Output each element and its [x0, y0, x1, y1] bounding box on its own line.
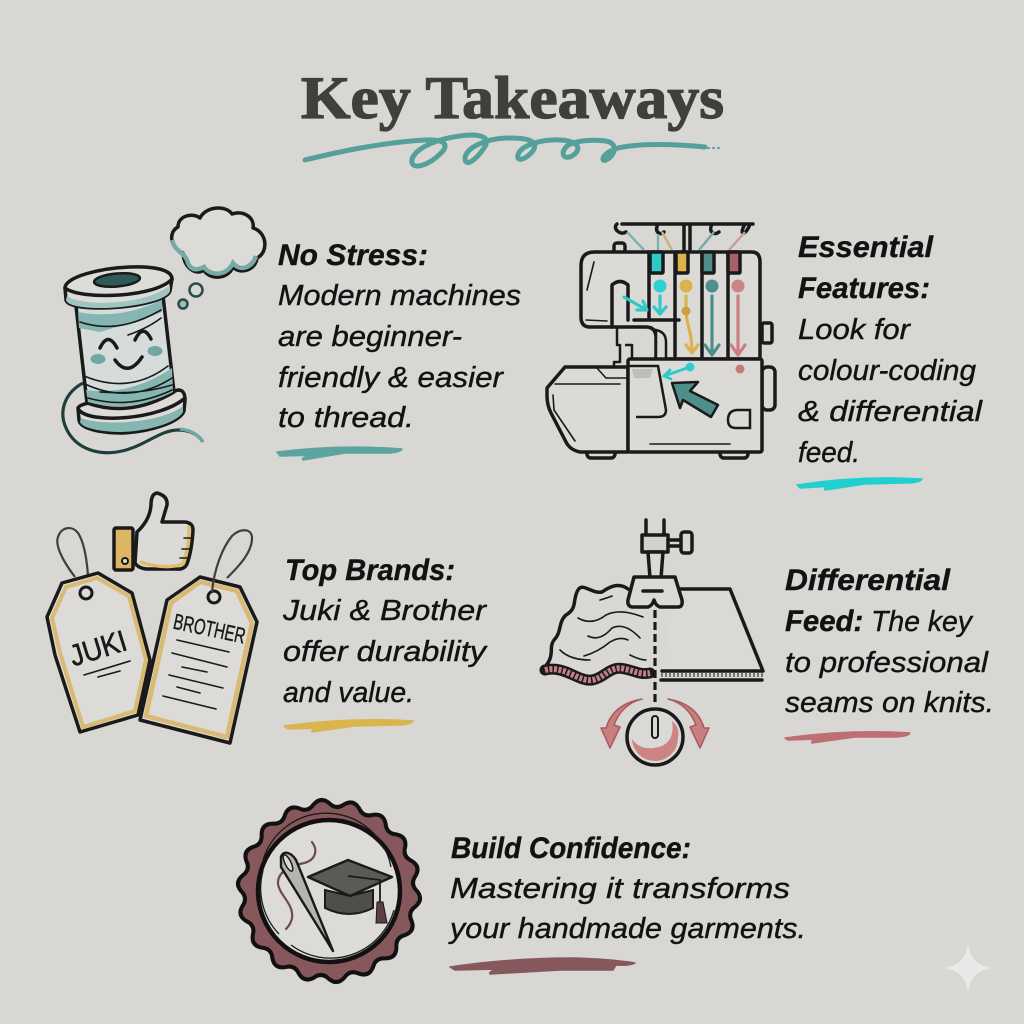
heading: top brands: Top Brands:	[285, 554, 455, 587]
icon: smiling thread spool	[63, 267, 203, 453]
icon: sparkle watermark	[944, 944, 992, 992]
body: build confidence: Mastering it transforms	[450, 873, 790, 905]
body: essential features: Look for	[798, 314, 911, 346]
icon: thought cloud	[172, 208, 265, 308]
needle area	[614, 327, 632, 372]
thread stand	[615, 224, 753, 252]
underline: maroon	[450, 958, 635, 974]
needle and thread	[278, 842, 315, 929]
flat fabric	[662, 589, 763, 671]
panel: build confidence	[238, 800, 806, 982]
top flange	[65, 267, 172, 308]
icon: Brother tag	[140, 530, 257, 743]
body: top brands: and value.	[283, 677, 414, 709]
body: essential features	[798, 314, 984, 469]
body: no stress	[278, 280, 521, 434]
presser foot	[646, 520, 664, 537]
heading: no stress: No Stress:	[278, 239, 428, 272]
underline: teal	[277, 447, 402, 460]
spool body	[76, 296, 174, 408]
body: essential features: colour-coding	[798, 355, 976, 387]
underline: yellow	[284, 720, 413, 732]
tag label: BROTHER	[171, 609, 248, 648]
body: build confidence: your handmade garments.	[448, 913, 806, 945]
loose thread	[63, 383, 203, 453]
dashed stitch line	[653, 610, 657, 703]
underline: rose	[785, 732, 910, 743]
icon: fabric under presser foot	[544, 520, 763, 703]
icon: overlocker machine	[547, 224, 775, 458]
body: top brands: offer durability	[283, 636, 488, 668]
body: differential feed: Feed: The key	[785, 605, 973, 638]
panel: differential feed	[544, 520, 994, 765]
heading: essential features	[798, 231, 934, 305]
graduation cap	[325, 890, 373, 914]
heading: essential features: Essential	[798, 231, 934, 264]
body: no stress: Modern machines	[278, 280, 521, 312]
icon: feed dial with arrows	[601, 699, 709, 765]
wavy fabric	[544, 585, 653, 680]
big green arrow	[672, 382, 718, 417]
icon: thumbs up	[114, 493, 193, 570]
panel: no stress	[63, 208, 521, 460]
body: essential features: & differential	[798, 396, 984, 428]
icon: Juki tag	[47, 528, 150, 732]
bottom flange	[78, 390, 185, 433]
body: top brands: Juki & Brother	[282, 595, 487, 627]
machine base	[547, 367, 628, 452]
heading: essential features: Features:	[798, 272, 930, 305]
icon: scalloped badge	[238, 800, 420, 982]
body: differential feed: seams on knits.	[785, 687, 994, 719]
body: differential feed: to professional	[785, 647, 990, 679]
heading: differential: Differential	[785, 564, 951, 597]
thread path arrows	[624, 296, 745, 355]
tension dials	[650, 252, 744, 292]
body: top brands	[282, 595, 488, 709]
title underline swirl	[305, 135, 719, 166]
body: build confidence	[448, 873, 806, 945]
body: essential features: feed.	[798, 437, 860, 469]
body: no stress: are beginner-	[278, 321, 462, 353]
body: differential feed	[785, 605, 994, 719]
body: no stress: friendly & easier	[278, 362, 504, 394]
underline: cyan	[797, 478, 922, 490]
panel: top brands	[47, 493, 488, 743]
panel: essential features	[547, 224, 984, 490]
tag label: JUKI	[66, 625, 131, 673]
title: Key Takeaways	[301, 65, 724, 131]
body: no stress: to thread.	[278, 402, 414, 434]
heading: build confidence: Build Confidence:	[451, 832, 691, 865]
